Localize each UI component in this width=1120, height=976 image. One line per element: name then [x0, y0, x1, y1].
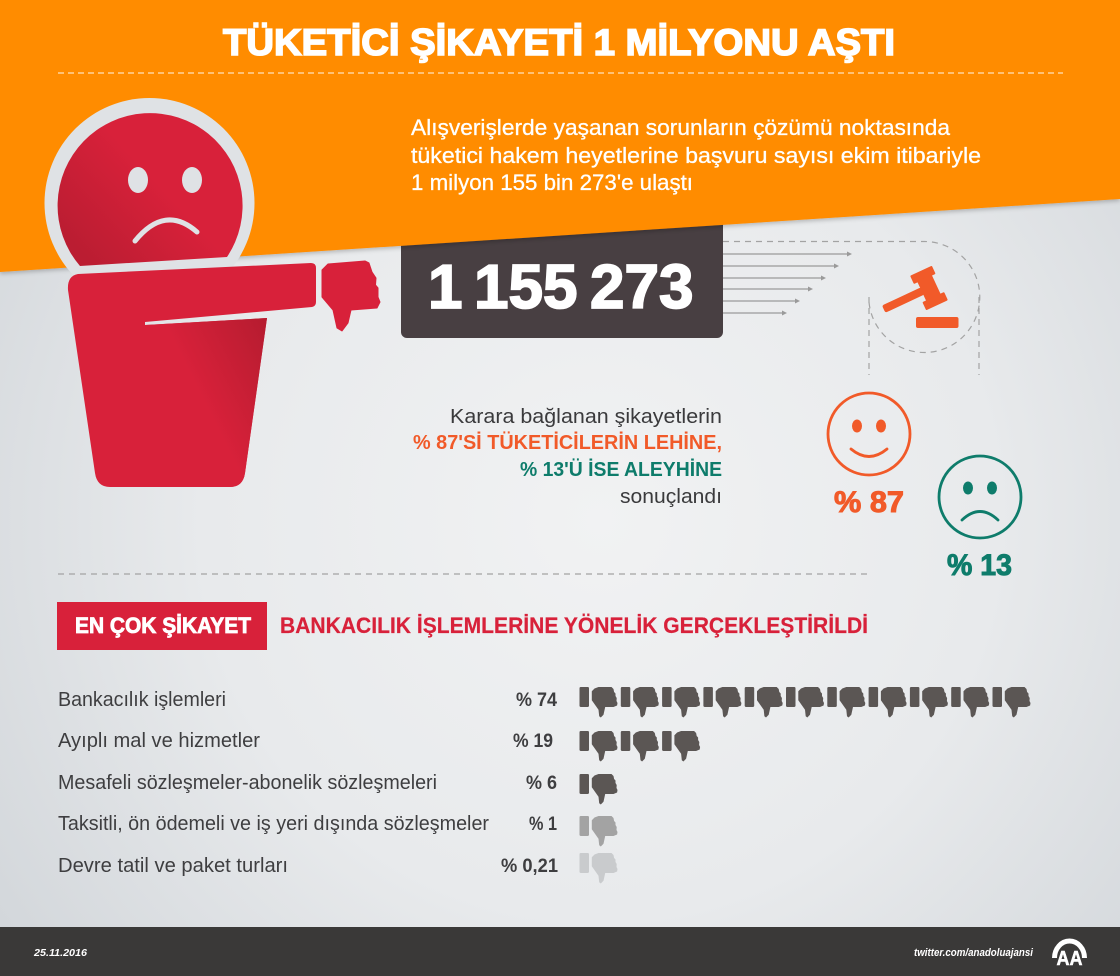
thumb down hand [322, 261, 380, 331]
icon: agency logo [1054, 941, 1084, 970]
sad face 13% [939, 456, 1021, 582]
row: Taksitli: % 1 [529, 814, 557, 835]
sad face 13%: % 13 [947, 549, 1012, 582]
body and arm [68, 263, 316, 487]
row: Ayıplı mal ve hizmetler: Ayıplı mal ve hizmetler [58, 730, 260, 752]
section heading text: BANKACILIK İŞLEMLERİNE YÖNELİK GERÇEKLEŞTİRİLDİ [280, 613, 868, 638]
number box: 1 155 273 [401, 215, 723, 338]
row: Ayıplı mal ve hizmetler: % 19 [513, 731, 553, 752]
lower body shading [140, 318, 267, 487]
row: Bankacılık işlemleri [58, 687, 1030, 718]
orange header band [0, 0, 1120, 272]
title: TÜKETİCİ ŞİKAYETİ 1 MİLYONU AŞTI [223, 22, 895, 63]
happy face 87%: % 87 [834, 486, 904, 519]
number box: 1 155 273: 155 [474, 253, 577, 322]
intro text: Alışverişlerde yaşanan sorunların çözümü noktasında [411, 115, 951, 140]
result text: % 13'Ü İSE ALEYHİNE [520, 458, 722, 481]
date: 25.11.2016 [33, 947, 87, 959]
head [58, 113, 243, 266]
row: Mesafeli sözleşmeler: % 6 [526, 773, 557, 794]
row: Devre tatil: Devre tatil ve paket turları [58, 855, 288, 877]
row: Bankacılık işlemleri: Bankacılık işlemleri [58, 689, 226, 711]
result text [413, 406, 722, 508]
head halo [44, 98, 254, 308]
intro text [411, 115, 981, 195]
row: Mesafeli sözleşmeler: Mesafeli sözleşmeler-abonelik sözleşmeleri [58, 772, 437, 794]
arrows from number box [723, 252, 852, 316]
section heading badge [57, 602, 267, 650]
result text: sonuçlandı [620, 486, 722, 508]
section heading badge: EN ÇOK ŞİKAYET [75, 613, 252, 638]
intro text: 1 milyon 155 bin 273'e ulaştı [411, 170, 693, 195]
mouth [135, 220, 197, 241]
row: Devre tatil [58, 853, 618, 884]
intro text: tüketici hakem heyetlerine başvuru sayısı ekim itibariyle [411, 143, 981, 168]
row: Mesafeli sözleşmeler [58, 772, 618, 804]
footer bar [0, 927, 1120, 976]
dashed connector lines [723, 241, 980, 375]
icon: agency logo: AA [1056, 948, 1082, 970]
twitter handle: twitter.com/anadoluajansi [914, 947, 1034, 959]
result text: % 87'Sİ TÜKETİCİLERİN LEHİNE, [413, 431, 722, 454]
number box: 1 155 273: 273 [590, 253, 693, 322]
row: Bankacılık işlemleri: % 74 [516, 690, 557, 711]
row: Ayıplı mal ve hizmetler [58, 730, 700, 762]
row: Taksitli: Taksitli, ön ödemeli ve iş yeri dışında sözleşmeler [58, 813, 489, 835]
happy face 87% [828, 393, 910, 519]
number box: 1 155 273: 1 [428, 253, 462, 322]
row: Devre tatil: % 0,21 [501, 856, 558, 877]
eyes [128, 167, 202, 193]
icon: gavel [876, 266, 958, 328]
result text: Karara bağlanan şikayetlerin [450, 406, 722, 428]
row: Taksitli [58, 813, 618, 846]
character: sad figure with thumb down [44, 98, 380, 487]
